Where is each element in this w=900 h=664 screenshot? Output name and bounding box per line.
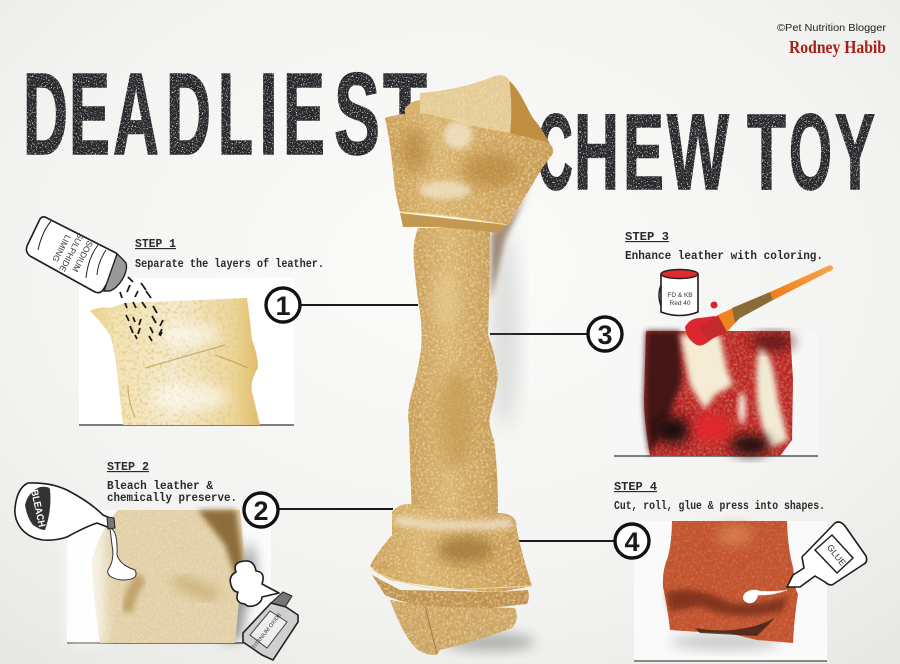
- panel: step 4: [614, 481, 867, 661]
- connector lines: [276, 305, 617, 541]
- step 1 text: Separate the layers of leather.: [135, 258, 324, 271]
- step 2 heading: STEP 2: [107, 461, 149, 474]
- step 2 text: [107, 480, 237, 505]
- icon: red paint can: Red 40: [670, 300, 691, 307]
- title: deadliest chew toy: D: [23, 49, 68, 179]
- title: deadliest chew toy: S: [334, 49, 380, 179]
- step 4 heading: STEP 4: [614, 481, 657, 494]
- step 4 photo: [634, 521, 827, 661]
- title: deadliest chew toy: T: [747, 91, 786, 212]
- top knot: [385, 75, 553, 233]
- title: deadliest chew toy: C: [537, 91, 573, 212]
- icon: glue bottle: [743, 522, 867, 603]
- credit: Rodney Habib: [789, 37, 886, 57]
- panel: step 2: [15, 461, 298, 660]
- title: deadliest chew toy: T: [383, 49, 427, 179]
- badge 2: 2: [253, 496, 269, 526]
- title: deadliest chew toy: A: [113, 49, 159, 179]
- badge 4: [615, 524, 649, 558]
- icon: bleach bottle: BLEACH: [28, 489, 47, 528]
- step 4 text: Cut, roll, glue & press into shapes.: [614, 500, 825, 513]
- title: deadliest chew toy: [23, 49, 875, 212]
- title: deadliest chew toy: E: [69, 49, 110, 179]
- title: deadliest chew toy: O: [789, 91, 832, 212]
- icon: red paint can: FD & KB: [667, 292, 693, 299]
- badge 3: 3: [597, 320, 613, 350]
- step 2 photo: [67, 510, 271, 643]
- credit: ©Pet Nutrition Blogger: [777, 22, 887, 34]
- icon: sodium sulphide liming shaker: SODIUM: [70, 239, 95, 274]
- panel: step 3: [588, 231, 833, 456]
- step 3 heading: STEP 3: [625, 231, 669, 244]
- step 2 text: chemically preserve.: [107, 492, 237, 505]
- step 3 photo: [614, 331, 818, 456]
- step 1 heading: STEP 1: [135, 238, 176, 251]
- icon: paint brush: [685, 265, 833, 346]
- title: deadliest chew toy: W: [667, 91, 729, 212]
- bone shaft: [408, 228, 498, 515]
- credit: [777, 22, 887, 57]
- title: deadliest chew toy: E: [623, 91, 664, 212]
- step 1 photo: [79, 278, 294, 425]
- title: deadliest chew toy: D: [166, 49, 211, 179]
- step 2 text: Bleach leather &: [107, 480, 213, 493]
- title: deadliest chew toy: I: [259, 49, 278, 179]
- icon: bleach bottle: [15, 483, 136, 580]
- icon: red paint can: [659, 270, 718, 316]
- title: deadliest chew toy: L: [218, 49, 253, 179]
- badge 2: [244, 493, 278, 527]
- badge 3: [588, 317, 622, 351]
- icon: sodium sulphide liming shaker: [26, 217, 163, 341]
- icon: sodium sulphide liming shaker: SULPHIDE: [57, 231, 86, 274]
- step 3 text: Enhance leather with coloring.: [625, 250, 823, 263]
- badge 1: 1: [275, 291, 291, 321]
- icon: glue bottle: GLUE: [825, 542, 848, 568]
- title: deadliest chew toy: H: [574, 91, 619, 212]
- badge 1: [266, 288, 300, 322]
- icon: titanium oxide spray: TITANIUM OXIDE: [251, 612, 283, 651]
- badge 4: 4: [624, 527, 640, 557]
- icon: titanium oxide spray: [230, 561, 298, 660]
- rawhide bone: [370, 75, 553, 655]
- icon: sodium sulphide liming shaker: LIMING: [50, 233, 73, 264]
- bottom knot: [370, 504, 532, 655]
- panel: step 1: [26, 217, 324, 425]
- title: deadliest chew toy: E: [283, 49, 325, 179]
